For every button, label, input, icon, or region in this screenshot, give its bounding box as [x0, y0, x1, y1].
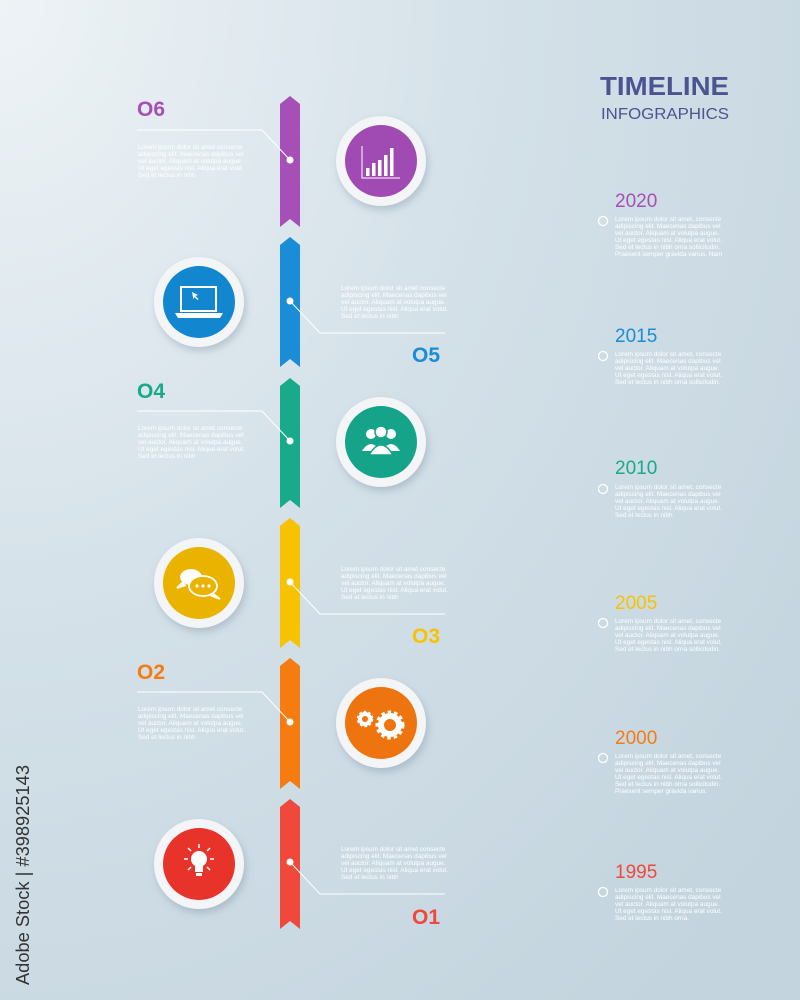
year 1995: vel auctor. Aliquam at volutpa augue.	[615, 901, 720, 908]
year 1995: Ut eget egestas nisl. Aliqua erat volut.	[615, 908, 722, 915]
year 2000: Lorem ipsum dolor sit amet, consecte	[615, 753, 722, 760]
item 04: vel auctor. Aliquam at volutpa augue.	[138, 439, 243, 446]
year 2000: Sed et lectus in nibh orna sollicitudin.	[615, 781, 720, 788]
year 2010: vel auctor. Aliquam at volutpa augue.	[615, 498, 720, 505]
icon: chat bubbles	[154, 538, 244, 628]
year 1995: Sed et lectus in nibh orna.	[615, 915, 689, 922]
item 04: adipiscing elit. Maecenas dapibus vel	[138, 432, 244, 439]
icon: bar chart	[336, 116, 426, 206]
year 2010: adipiscing elit. Maecenas dapibus vel	[615, 491, 721, 498]
icon: laptop	[154, 257, 244, 347]
year 2015: Ut eget egestas nisl. Aliqua erat volut.	[615, 372, 722, 379]
item 06: Ut eget egestas nisl. Aliqua erat voat.	[138, 165, 244, 172]
icon: gears	[336, 678, 426, 768]
item 01: Ut eget egestas nisl. Aliqua erat volut.	[341, 867, 448, 874]
item 06: Lorem ipsum dolor sit amet consecte	[138, 144, 243, 151]
side watermark id: Adobe Stock | #398925143	[13, 765, 33, 985]
item 06: vel auctor. Aliquam at volutpa augue.	[138, 158, 243, 165]
year 2005	[598, 593, 722, 653]
year 2020: Praesent semper gravida varius. Nam	[615, 251, 722, 258]
item 05: adipiscing elit. Maecenas dapibus vel	[341, 292, 447, 299]
year 2000	[598, 728, 722, 795]
item 05: vel auctor. Aliquam at volutpa augue.	[341, 299, 446, 306]
year 2005: adipiscing elit. Maecenas dapibus vel	[615, 625, 721, 632]
item 06: Sed et lectus in nibh	[138, 172, 196, 179]
item 02: Ut eget egestas nisl. Aliqua erat volut.	[138, 727, 245, 734]
year 2010: Lorem ipsum dolor sit amet, consecte	[615, 484, 722, 491]
title: INFOGRAPHICS	[601, 106, 729, 123]
item 03: vel auctor. Aliquam at volutpa augue.	[341, 580, 446, 587]
item 01	[154, 819, 448, 929]
item 02: Lorem ipsum dolor sit amet consecte	[138, 706, 243, 713]
ribbon: 04 teal	[280, 378, 300, 508]
year 2005: Sed et lectus in nibh orna sollicitudin.	[615, 646, 720, 653]
year 2010	[598, 458, 722, 519]
item 02: adipiscing elit. Maecenas dapibus vel	[138, 713, 244, 720]
year 2020	[598, 191, 722, 258]
year list	[598, 191, 722, 922]
item 01: Sed et lectus in nibh	[341, 874, 399, 881]
ribbon: 03 yellow	[280, 518, 300, 648]
item 03: Ut eget egestas nisl. Aliqua erat volut.	[341, 587, 448, 594]
item 05	[154, 257, 448, 367]
item 04: O4	[137, 380, 165, 403]
item 06: adipiscing elit. Maecenas dapibus vel	[138, 151, 244, 158]
ribbon: 06 purple	[280, 96, 300, 227]
year 2020: Ut eget egestas nisl. Aliqua erat volut.	[615, 237, 722, 244]
icon: people	[336, 397, 426, 487]
item 01: vel auctor. Aliquam at volutpa augue.	[341, 860, 446, 867]
title: TIMELINE	[600, 71, 729, 101]
year 1995: adipiscing elit. Maecenas dapibus vel	[615, 894, 721, 901]
year 2010: 2010	[615, 458, 657, 479]
year 2015	[598, 326, 722, 386]
item 01: adipiscing elit. Maecenas dapibus vel	[341, 853, 447, 860]
year 2000: vel auctor. Aliquam at volutpa augue.	[615, 767, 720, 774]
item 03: adipiscing elit. Maecenas dapibus vel	[341, 573, 447, 580]
item 01: Lorem ipsum dolor sit amet consecte	[341, 846, 446, 853]
item 02	[137, 661, 426, 768]
year 2010: Sed et lectus in nibh	[615, 512, 673, 519]
item 04	[137, 380, 426, 487]
year 2020: Lorem ipsum dolor sit amet, consecte	[615, 216, 722, 223]
year 2020: Sed et lectus in nibh orna sollicitudin.	[615, 244, 720, 251]
item 02: Sed et lectus in nibh	[138, 734, 196, 741]
year 1995	[598, 862, 722, 922]
year 2005: Lorem ipsum dolor sit amet, consecte	[615, 618, 722, 625]
year 2000: Ut eget egestas nisl. Aliqua erat volut.	[615, 774, 722, 781]
year 1995: Lorem ipsum dolor sit amet, consecte	[615, 887, 722, 894]
year 2005: 2005	[615, 593, 657, 614]
year 1995: 1995	[615, 862, 657, 883]
item 02: vel auctor. Aliquam at volutpa augue.	[138, 720, 243, 727]
item 03: Sed et lectus in nibh	[341, 594, 399, 601]
item 03	[154, 538, 448, 648]
item 04: Lorem ipsum dolor sit amet consecte	[138, 425, 243, 432]
item 06: O6	[137, 98, 165, 121]
item 05: Lorem ipsum dolor sit amet consecte	[341, 285, 446, 292]
item 05: Ut eget egestas nisl. Aliqua erat volut.	[341, 306, 448, 313]
year 2005: Ut eget egestas nisl. Aliqua erat volut.	[615, 639, 722, 646]
year 2015: vel auctor. Aliquam at volutpa augue.	[615, 365, 720, 372]
item 06	[137, 98, 426, 206]
year 2015: adipiscing elit. Maecenas dapibus vel	[615, 358, 721, 365]
item 02: O2	[137, 661, 165, 684]
ribbon: 02 orange	[280, 658, 300, 789]
year 2000: Praesent semper gravida varius.	[615, 788, 707, 795]
year 2000: 2000	[615, 728, 657, 749]
year 2020: vel auctor. Aliquam at volutpa augue.	[615, 230, 720, 237]
year 2020: adipiscing elit. Maecenas dapibus vel	[615, 223, 721, 230]
year 2015: 2015	[615, 326, 657, 347]
item 03: O3	[412, 625, 440, 648]
item 04: Sed et lectus in nibh	[138, 453, 196, 460]
year 2015: Lorem ipsum dolor sit amet, consecte	[615, 351, 722, 358]
item 04: Ut eget egestas nisl. Aliqua erat volut.	[138, 446, 245, 453]
title	[600, 71, 729, 123]
item 05: O5	[412, 344, 440, 367]
icon: light bulb	[154, 819, 244, 909]
item 03: Lorem ipsum dolor sit amet consecte	[341, 566, 446, 573]
item 05: Sed et lectus in nibh	[341, 313, 399, 320]
year 2020: 2020	[615, 191, 657, 212]
year 2000: adipiscing elit. Maecenas dapibus vel	[615, 760, 721, 767]
item 01: O1	[412, 906, 440, 929]
year 2010: Ut eget egestas nisl. Aliqua erat volut.	[615, 505, 722, 512]
year 2015: Sed et lectus in nibh orna sollicitudin.	[615, 379, 720, 386]
ribbon: 01 red	[280, 799, 300, 929]
ribbon: 05 blue	[280, 237, 300, 367]
year 2005: vel auctor. Aliquam at volutpa augue.	[615, 632, 720, 639]
